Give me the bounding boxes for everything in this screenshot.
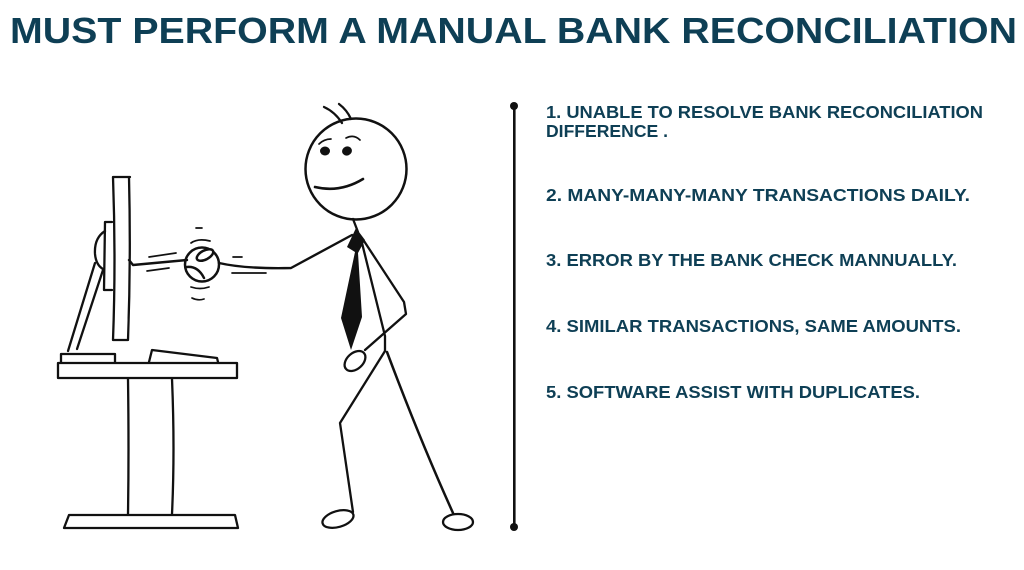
list item 2: 2. MANY-MANY-MANY TRANSACTIONS DAILY. xyxy=(546,185,970,205)
monitor stand xyxy=(68,263,103,351)
list item 3: 3. ERROR BY THE BANK CHECK MANNUALLY. xyxy=(546,250,957,270)
mouth xyxy=(315,179,363,189)
left foot xyxy=(320,507,356,531)
vertical timeline xyxy=(510,102,518,531)
list item 1: DIFFERENCE . xyxy=(546,121,668,141)
hair xyxy=(324,104,351,123)
extended arm xyxy=(129,235,352,268)
monitor base xyxy=(61,354,115,362)
desk foot xyxy=(64,515,238,528)
hands clasped xyxy=(185,248,219,282)
list item 5: 5. SOFTWARE ASSIST WITH DUPLICATES. xyxy=(546,382,920,402)
desk top xyxy=(58,363,237,378)
tie xyxy=(341,228,365,350)
eyes xyxy=(320,145,353,157)
hand on hip xyxy=(341,347,369,375)
front leg xyxy=(340,351,385,512)
right foot xyxy=(443,514,473,530)
monitor hinge xyxy=(95,231,105,269)
illustration: computer on desk xyxy=(58,177,238,528)
desk legs xyxy=(128,379,174,514)
neck and torso xyxy=(353,219,385,351)
list item 1 xyxy=(546,102,983,141)
list item 1: 1. UNABLE TO RESOLVE BANK RECONCILIATION xyxy=(546,102,983,122)
list item 4: 4. SIMILAR TRANSACTIONS, SAME AMOUNTS. xyxy=(546,316,961,336)
thumb xyxy=(195,247,215,263)
eyebrows xyxy=(319,136,360,144)
monitor screen xyxy=(113,177,130,340)
keyboard xyxy=(149,350,218,362)
head xyxy=(306,118,406,220)
bent arm xyxy=(364,241,406,350)
monitor bracket xyxy=(104,222,112,290)
motion lines xyxy=(147,228,266,300)
back leg xyxy=(387,352,453,513)
illustration: stick figure shaking hands with the computer xyxy=(129,104,473,531)
title: MUST PERFORM A MANUAL BANK RECONCILIATION xyxy=(10,10,1017,51)
